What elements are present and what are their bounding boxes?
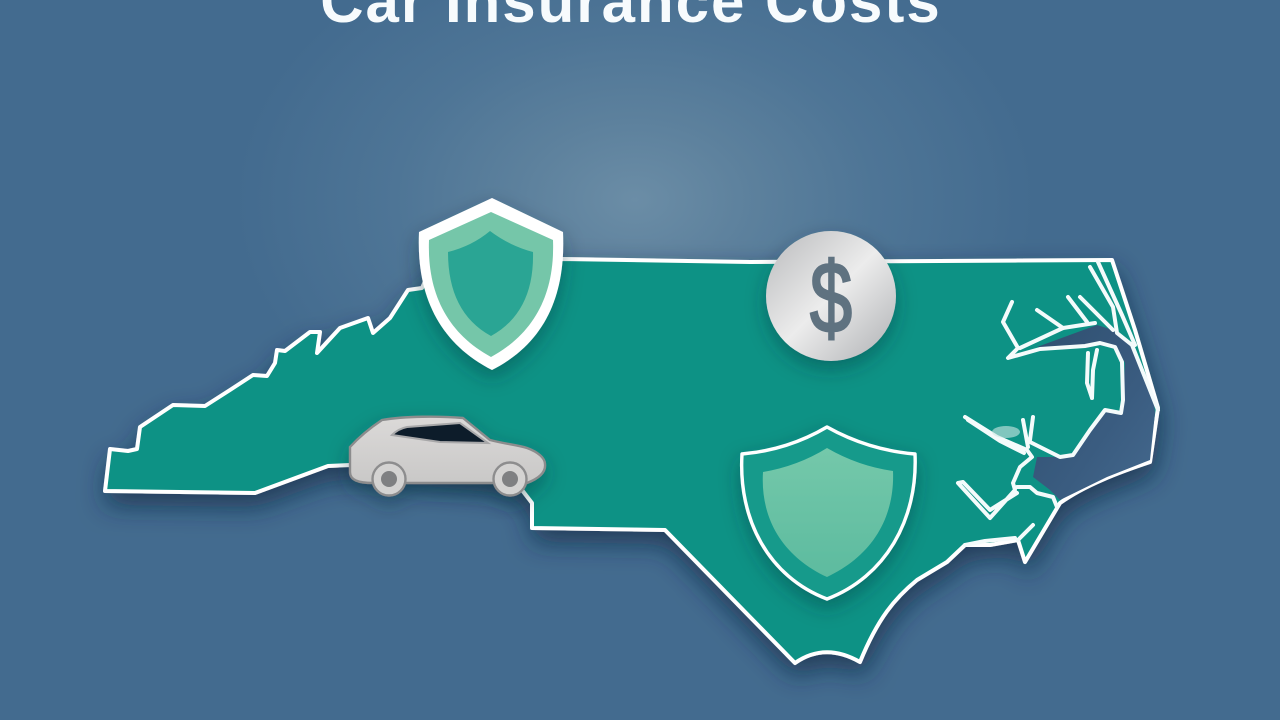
coastline details <box>958 262 1158 545</box>
dollar sign: $ <box>810 242 852 353</box>
wheels <box>372 462 526 496</box>
coastal highlight <box>992 426 1020 438</box>
car window <box>392 423 488 443</box>
icon: upper shield <box>419 198 563 370</box>
North Carolina map <box>105 259 1158 663</box>
icon: dollar coin <box>766 231 896 361</box>
sound water <box>1033 325 1155 500</box>
icon: car <box>350 417 545 496</box>
icon: lower shield <box>742 427 915 599</box>
